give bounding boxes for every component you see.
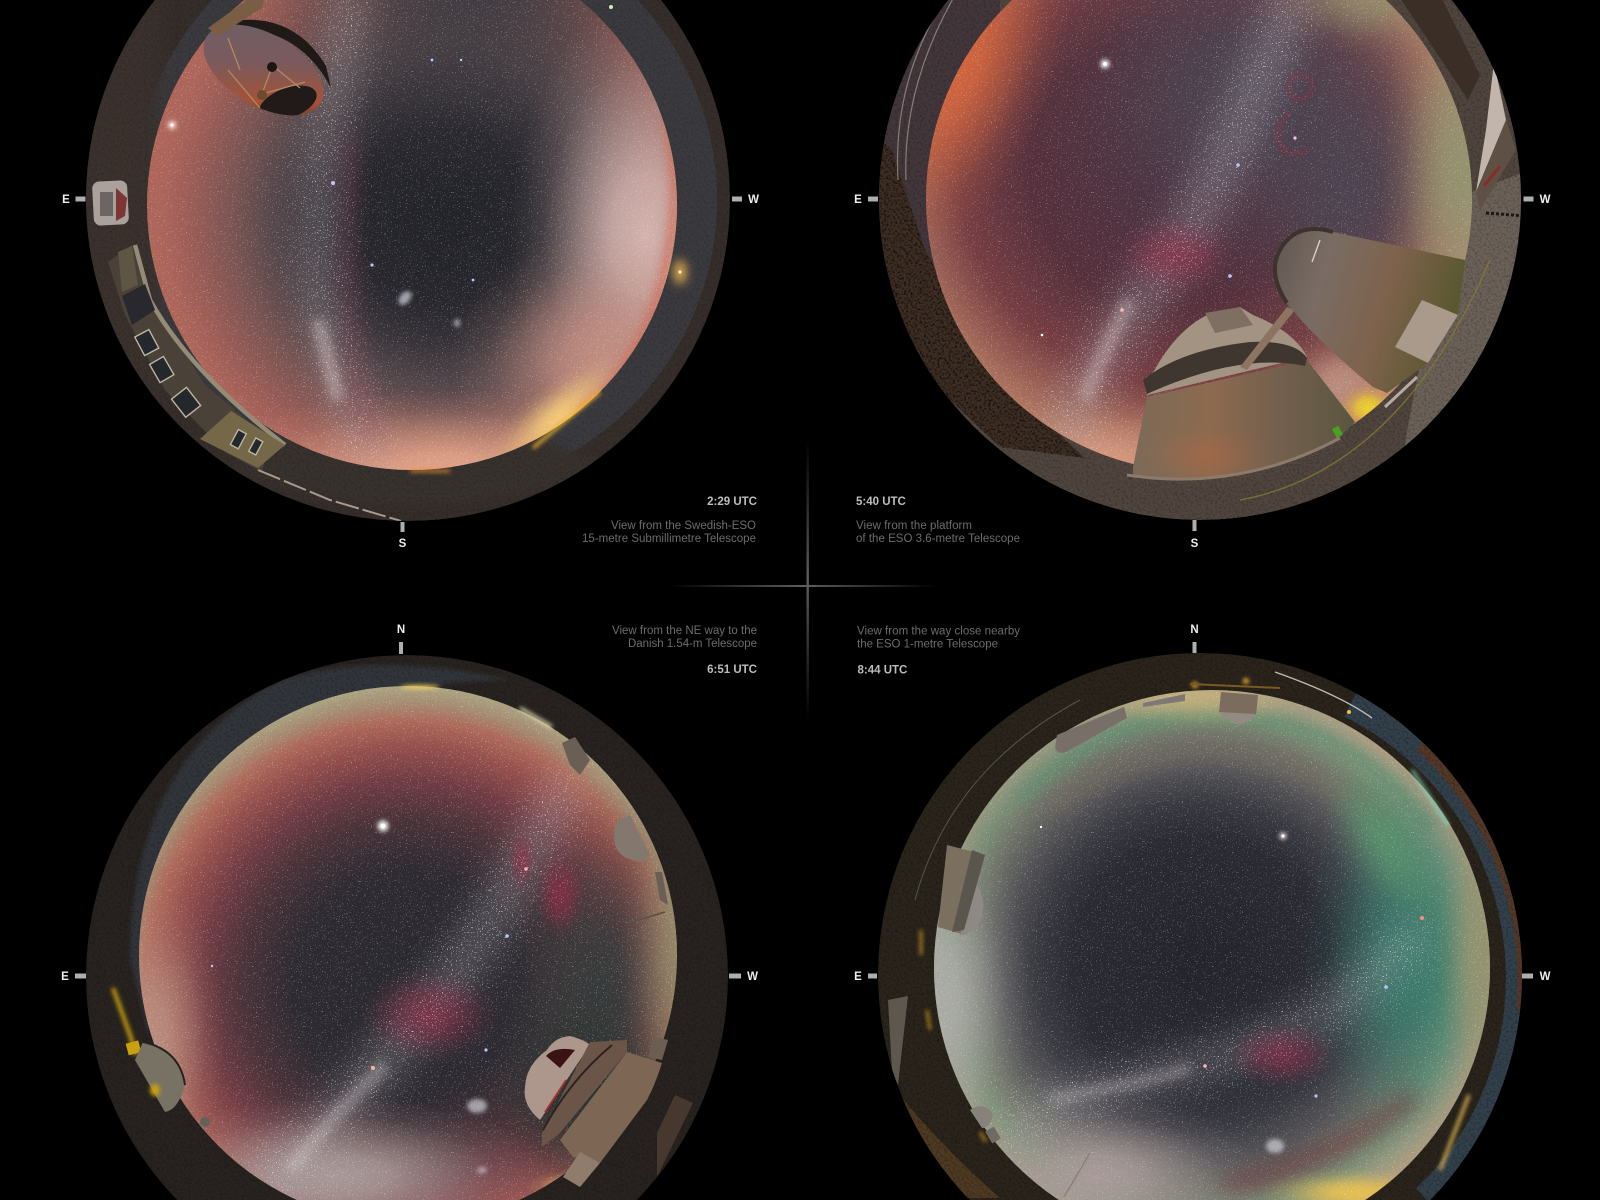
star field: [930, 685, 1495, 1200]
lattice mast: [1064, 1153, 1090, 1197]
Milky Way: [1031, 0, 1331, 450]
compass: panel 2: E: [854, 194, 862, 206]
caption: 6:51 UTC: View from the NE way to the: [612, 625, 757, 637]
caption: 8:44 UTC: View from the way close nearby: [857, 626, 1020, 638]
bright stars and Magellanic Cloud: [1040, 826, 1424, 1153]
night sky with airglow: [147, 0, 677, 470]
rocky ground ring: [850, 0, 1530, 530]
east rim sign: [888, 996, 908, 1085]
caption: 6:51 UTC: [612, 625, 757, 676]
compass: panel 4: N: [1190, 624, 1199, 636]
centre crosshair: [668, 439, 939, 721]
bright stars and Magellanic Clouds: [211, 820, 528, 1173]
telescope dome at the north: [1219, 692, 1258, 724]
caption: 5:40 UTC: View from the platform: [856, 520, 972, 532]
ground ring: [60, 0, 740, 530]
night sky with airglow: [139, 686, 677, 1200]
compass: panel 3: [61, 624, 758, 983]
compass: panel 2: [854, 194, 1551, 550]
compass: panel 4: [854, 624, 1551, 983]
compass: panel 3: E: [61, 971, 69, 983]
caption: 2:29 UTC: 15-metre Submillimetre Telescope: [582, 533, 756, 545]
small dome in the east: [135, 1042, 210, 1127]
night sky with airglow: [926, 0, 1472, 464]
horizon lights and coast: [921, 678, 1469, 1170]
compass: panel 3: N: [397, 624, 405, 636]
star field: [920, 0, 1480, 480]
bright stars: [1041, 60, 1297, 336]
panel: all-sky view at 5:40 UTC: [879, 0, 1521, 520]
distant domes on the west rim: [562, 737, 668, 923]
star field: [130, 680, 690, 1200]
panel: all-sky view at 2:29 UTC: [86, 0, 730, 521]
submillimetre dish: [204, 20, 331, 116]
caption: 6:51 UTC: 6:51 UTC: [707, 664, 757, 676]
ground ring: [80, 650, 740, 1200]
star field: [140, 0, 690, 480]
distant lights: [410, 5, 686, 471]
compass: panel 1: S: [399, 538, 407, 550]
compass: panel 4: E: [854, 971, 862, 983]
night sky with airglow: [840, 670, 1535, 1200]
low building at the north: [1143, 694, 1185, 707]
large dome building in the east: [938, 845, 985, 935]
compass: panel 2: W: [1540, 194, 1551, 206]
caption: 5:40 UTC: of the ESO 3.6-metre Telescope: [856, 533, 1020, 545]
fence: [258, 470, 401, 521]
compass: panel 2: S: [1191, 538, 1199, 550]
caption: 2:29 UTC: [582, 496, 757, 545]
compass: panel 3: W: [747, 971, 758, 983]
Milky Way: [239, 760, 602, 1200]
caption: 5:40 UTC: 5:40 UTC: [856, 496, 906, 508]
caption: 8:44 UTC: the ESO 1-metre Telescope: [857, 638, 998, 650]
west-side building strip: [1398, 0, 1526, 216]
large Danish telescope dome: [525, 1036, 693, 1187]
coudé telescope tower: [1240, 229, 1465, 407]
panel: all-sky view at 6:51 UTC: [75, 650, 740, 1200]
control building roof corner: [208, 0, 264, 36]
small domes in the south-east: [970, 1106, 1001, 1144]
caption: 2:29 UTC: 2:29 UTC: [707, 496, 757, 508]
compass: panel 1: E: [62, 194, 70, 206]
horizon lights: [113, 685, 552, 1055]
compass: panel 1: W: [748, 194, 759, 206]
green door: [1332, 426, 1343, 438]
caption: 8:44 UTC: [857, 626, 1020, 676]
railing: [1127, 438, 1340, 479]
Milky Way: [276, 0, 403, 466]
ground ring: [870, 650, 1530, 1200]
compass: panel 4: W: [1540, 971, 1551, 983]
caption: 5:40 UTC: [856, 496, 1020, 545]
caption: 6:51 UTC: Danish 1.54-m Telescope: [628, 638, 757, 650]
long building at the north-east: [1055, 707, 1127, 753]
SEST building: [108, 245, 285, 472]
caption: 8:44 UTC: 8:44 UTC: [858, 664, 907, 676]
parked car: [92, 180, 129, 226]
panel: all-sky view at 8:44 UTC: [840, 650, 1535, 1200]
caption: 2:29 UTC: View from the Swedish-ESO: [611, 520, 756, 532]
bright stars and Magellanic Clouds: [168, 59, 474, 327]
ESO 3.6-metre dome: [1133, 307, 1355, 487]
Milky Way: [930, 685, 1495, 1200]
compass: panel 1: [62, 194, 759, 550]
